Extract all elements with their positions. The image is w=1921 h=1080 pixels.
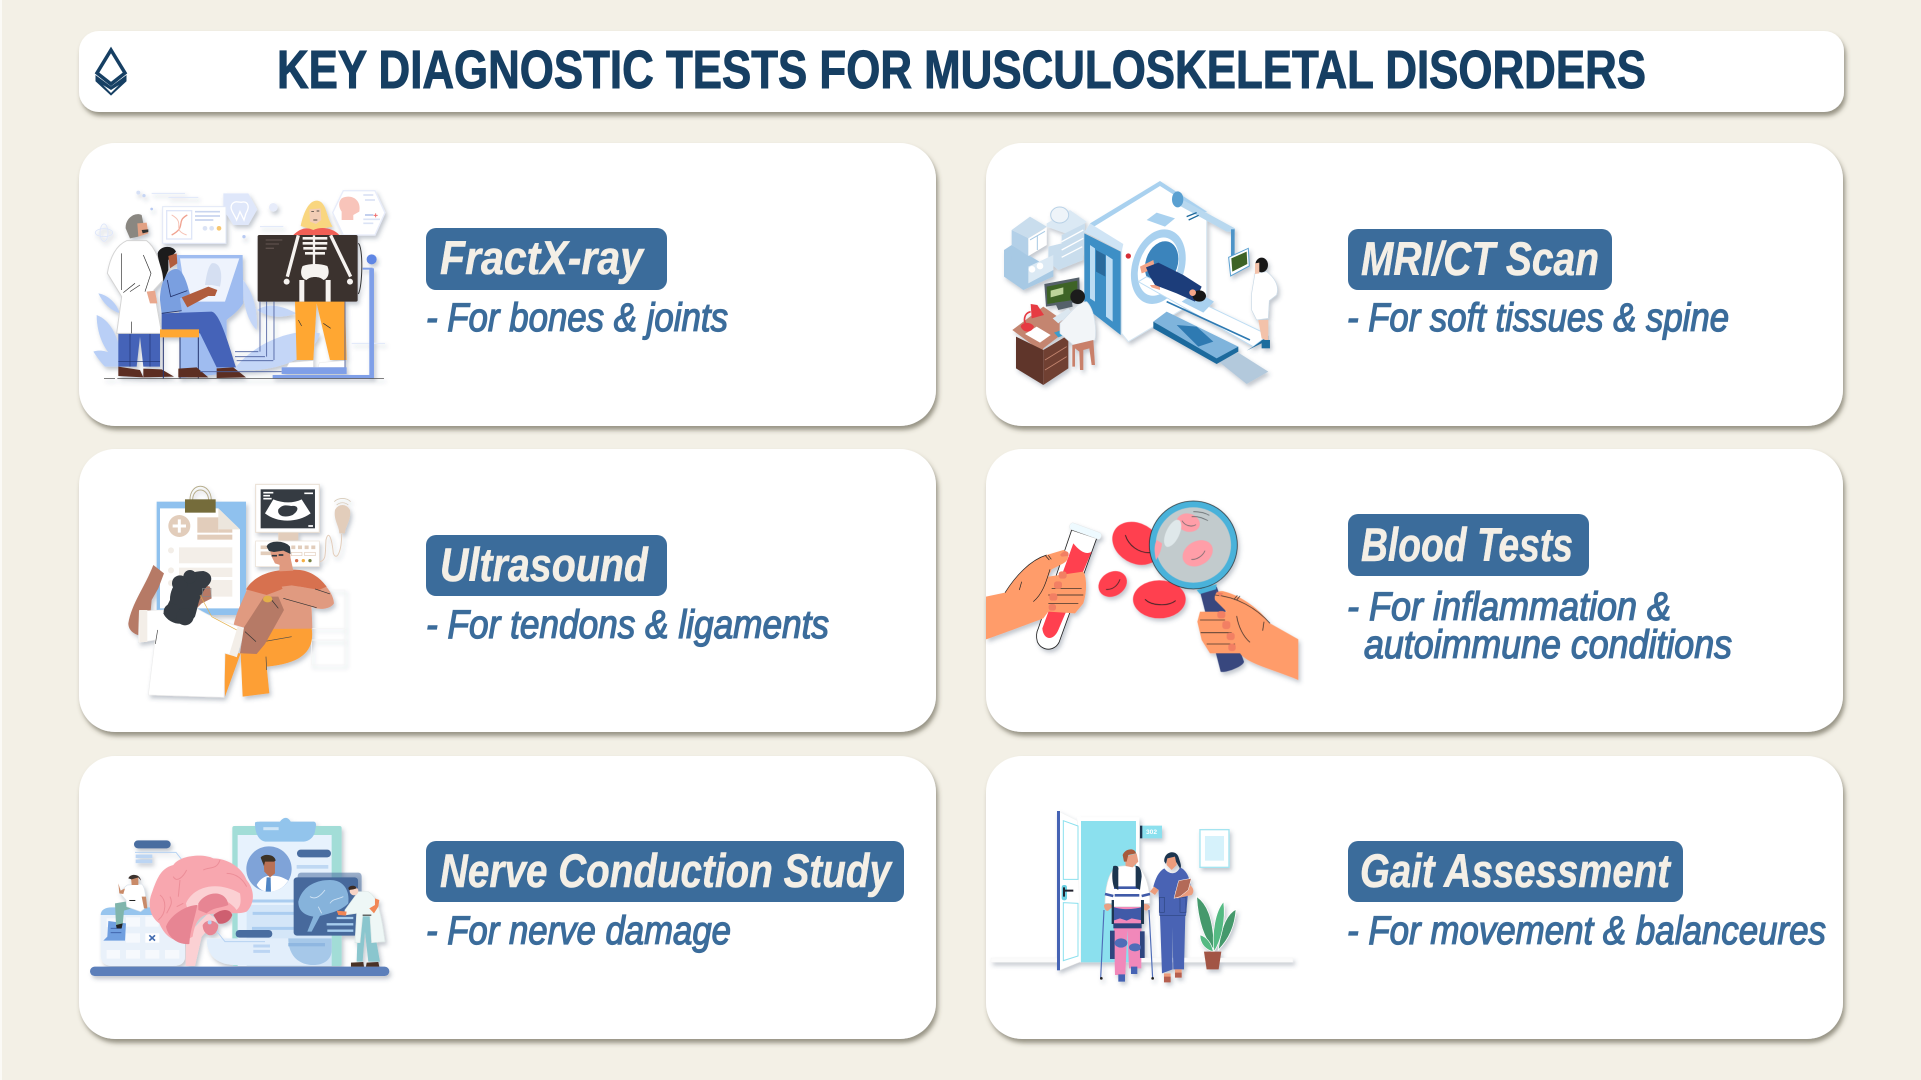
calendar xyxy=(101,915,185,966)
table xyxy=(1153,312,1238,360)
scanner xyxy=(1085,182,1207,342)
blood cells xyxy=(1104,513,1169,573)
hand left xyxy=(986,550,1086,639)
panel: MRI/CT Scan xyxy=(986,143,1843,426)
hand right xyxy=(1197,591,1298,680)
x-ray stand xyxy=(200,302,345,372)
scan panel xyxy=(298,873,362,931)
plant xyxy=(1197,897,1214,950)
title: KEY DIAGNOSTIC TESTS FOR MUSCULOSKELETAL DISORDERS xyxy=(277,40,1646,100)
doctor xyxy=(118,330,160,367)
illustration: ultrasound exam xyxy=(128,484,351,697)
illustration: MRI scanner room xyxy=(1004,181,1278,385)
description: soft tissues and spine: - For soft tissues & spine xyxy=(1347,296,1729,340)
patient xyxy=(224,628,312,697)
brain xyxy=(186,913,217,966)
test tube xyxy=(1037,530,1097,649)
patient xyxy=(1101,910,1153,978)
description: bones and joints: - For bones & joints xyxy=(426,296,728,340)
description: inflammation and autoimmune conditions: autoimmune conditions xyxy=(1364,623,1732,667)
desk and nurse xyxy=(1012,307,1072,352)
panel: Blood Tests xyxy=(986,449,1843,732)
monitor xyxy=(278,532,298,540)
illustration: blood test xyxy=(986,501,1298,680)
nurse xyxy=(1160,915,1185,973)
header bar xyxy=(79,31,1844,112)
seated doctor xyxy=(115,900,135,925)
illustration: brain and clipboard xyxy=(90,818,389,976)
tag: FractX-ray: FractX-ray xyxy=(440,231,645,284)
paper xyxy=(207,938,313,965)
description: inflammation and autoimmune conditions: - For inflammation & xyxy=(1347,585,1671,629)
panel: FractX-ray xyxy=(79,143,936,426)
description: nerve damage: - For nerve damage xyxy=(426,909,731,953)
doctor xyxy=(1258,320,1268,342)
console xyxy=(256,541,319,567)
description: movement and balanceures: - For movement & balanceures xyxy=(1347,909,1826,953)
tag: Gait Assessment: Gait Assessment xyxy=(1360,844,1672,897)
probe xyxy=(335,505,350,533)
icon: diamond drop logo xyxy=(96,50,126,95)
panel: Nerve Conduction Study xyxy=(79,756,936,1039)
standing doctor xyxy=(357,915,380,962)
illustration: x-ray room xyxy=(93,191,385,379)
cabinets xyxy=(1004,245,1053,290)
patient xyxy=(1140,260,1160,290)
panel: Ultrasound xyxy=(79,449,936,732)
illustration: gait with exoskeleton xyxy=(991,811,1293,982)
panel: Gait Assessment xyxy=(986,756,1843,1039)
description: tendons and ligaments: - For tendons & ligaments xyxy=(426,603,829,647)
description: inflammation and autoimmune conditions xyxy=(1347,585,1732,667)
overhead monitor arm xyxy=(1178,198,1235,232)
tag: Nerve Conduction Study: Nerve Conduction Study xyxy=(440,844,893,897)
stool lines xyxy=(312,590,345,665)
illustration: gait with exoskeleton: 302 xyxy=(1146,829,1157,836)
doctor xyxy=(128,565,164,637)
x-ray woman xyxy=(301,201,333,230)
clipboard xyxy=(232,826,342,966)
tag: MRI/CT Scan: MRI/CT Scan xyxy=(1361,232,1599,285)
nurse xyxy=(162,312,236,367)
tag: Blood Tests: Blood Tests xyxy=(1361,518,1573,571)
annotations xyxy=(134,840,171,848)
magnifier xyxy=(1200,587,1244,672)
tag: Ultrasound: Ultrasound xyxy=(440,538,649,591)
